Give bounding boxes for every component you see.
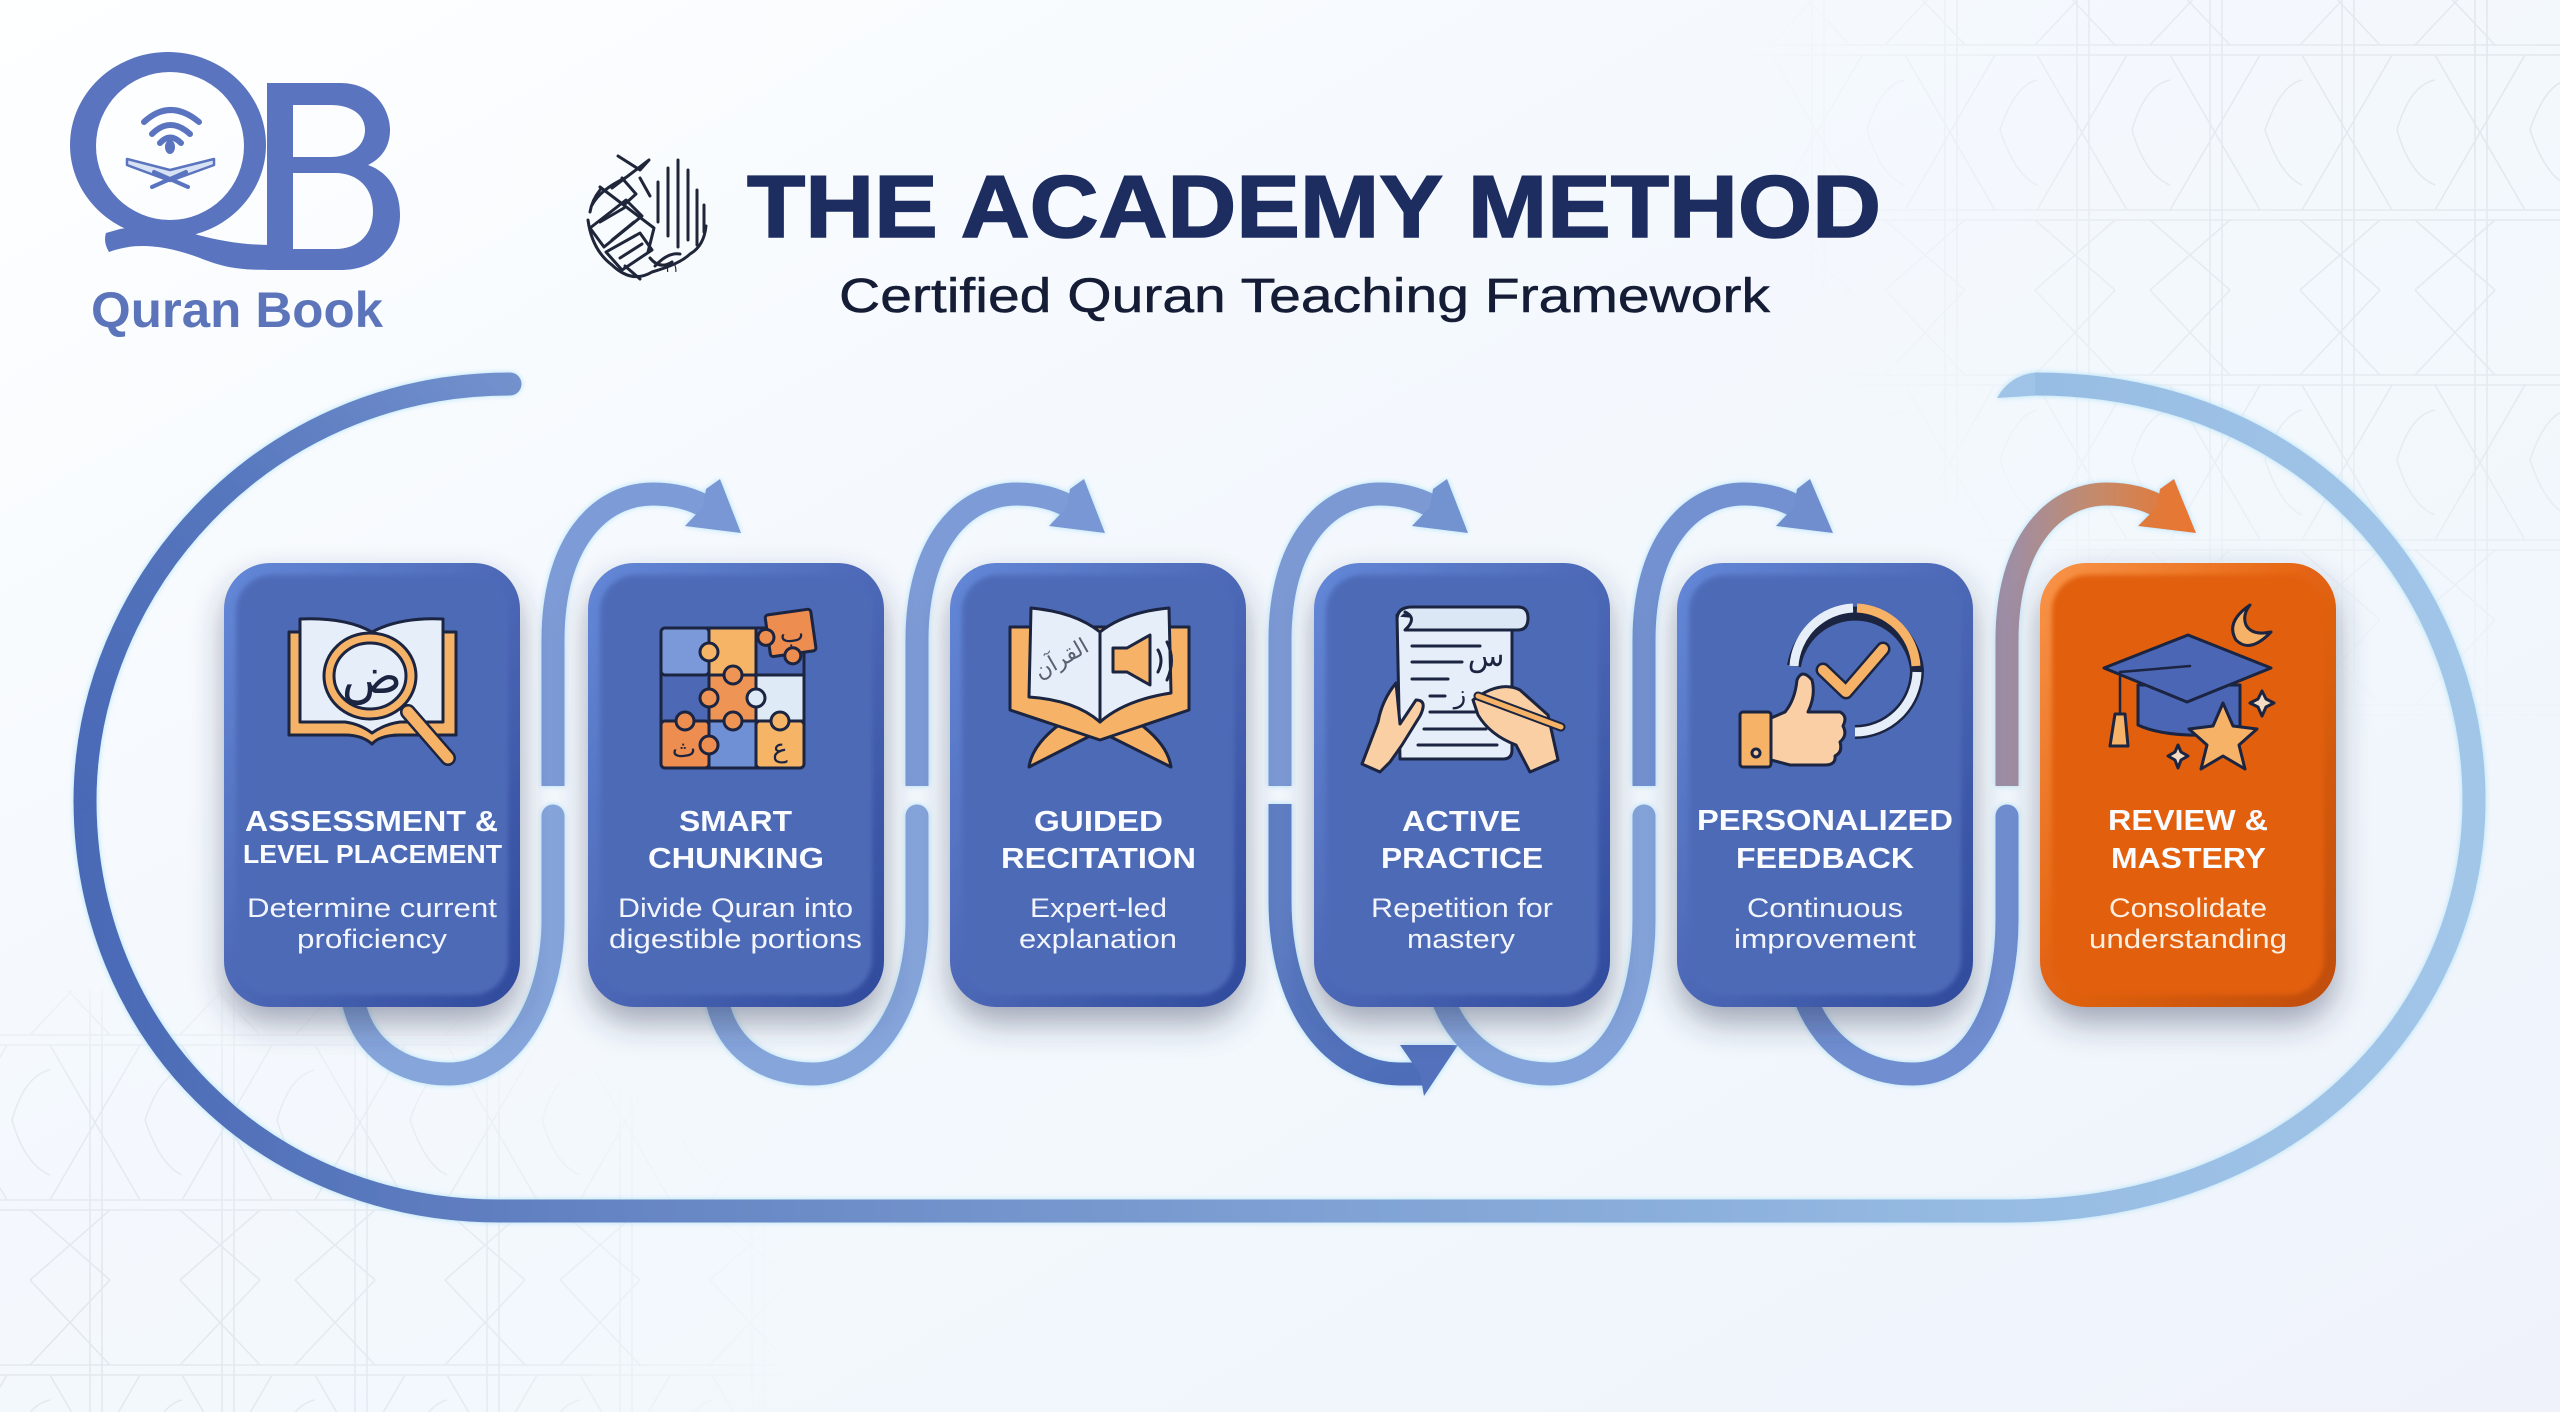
step 1 description: Determine current bbox=[247, 893, 498, 923]
step 6 title line 2: MASTERY bbox=[2111, 843, 2266, 875]
panel: step 6 review and mastery bbox=[2040, 563, 2336, 1007]
logo mark: QB letters bbox=[70, 52, 400, 270]
step 4 title line 2: PRACTICE bbox=[1381, 843, 1543, 875]
icon: scroll with writing hands bbox=[1362, 607, 1561, 772]
arrow: step 2 to step 3 connector bbox=[717, 479, 1105, 1074]
step 5 description: Continuous bbox=[1747, 893, 1903, 923]
icon: book with magnifier bbox=[289, 619, 456, 758]
step 6 description: Consolidate bbox=[2109, 893, 2267, 923]
step 4 description line 2: mastery bbox=[1407, 924, 1516, 954]
step 4 description: Repetition for bbox=[1371, 893, 1553, 923]
panel: step 5 personalized feedback bbox=[1677, 563, 1973, 1007]
arrow: step 5 to step 6 connector bbox=[1806, 479, 2196, 1074]
panel: step 1 assessment bbox=[224, 563, 520, 1007]
panel: step 2 smart chunking bbox=[588, 563, 884, 1007]
title: THE ACADEMY METHOD bbox=[747, 157, 1881, 256]
arrow: step 4 to step 5 connector bbox=[1443, 479, 1833, 1074]
arrow: step 1 to step 2 connector bbox=[353, 479, 741, 1074]
icon: open Quran on stand with speaker bbox=[1010, 608, 1189, 767]
panel: step 2 smart chunking: ع bbox=[772, 734, 788, 764]
panel: step 4 active practice: ز bbox=[1452, 680, 1466, 710]
panel: step 4 active practice bbox=[1314, 563, 1610, 1007]
step 6 description line 2: understanding bbox=[2089, 924, 2287, 954]
icon: puzzle with Arabic letters bbox=[661, 609, 818, 768]
panel: step 3 guided recitation: القرآن bbox=[1029, 632, 1093, 685]
logo: Quran Book bbox=[70, 52, 400, 338]
step 1 description line 2: proficiency bbox=[297, 924, 448, 954]
panel: step 2 smart chunking: ث bbox=[672, 734, 696, 764]
step 2 title line 2: CHUNKING bbox=[648, 843, 824, 875]
step 2 description: Divide Quran into bbox=[618, 893, 853, 923]
arrow: outer cycle loop bbox=[85, 372, 2474, 1211]
icon: graduation cap with star and moon bbox=[2104, 605, 2274, 769]
step 3 title: GUIDED bbox=[1034, 806, 1163, 838]
step 2 title: SMART bbox=[679, 806, 792, 838]
step 6 title: REVIEW & bbox=[2108, 805, 2268, 837]
step 1 title: ASSESSMENT & bbox=[245, 806, 498, 838]
step 2 description line 2: digestible portions bbox=[609, 924, 862, 954]
icon: wifi over open book bbox=[127, 110, 214, 187]
icon: thumbs up with progress ring and check bbox=[1740, 608, 1917, 767]
step 3 title line 2: RECITATION bbox=[1001, 843, 1196, 875]
arrow: step 3 to step 4 connector bbox=[1280, 479, 1468, 1096]
logo wordmark: Quran Book bbox=[91, 282, 383, 338]
step 5 title line 2: FEEDBACK bbox=[1736, 843, 1914, 875]
panel: step 1 assessment: ض bbox=[342, 647, 402, 705]
step 3 description: Expert-led bbox=[1030, 893, 1167, 923]
panel: step 2 smart chunking: ب bbox=[780, 619, 804, 649]
subtitle: Certified Quran Teaching Framework bbox=[839, 270, 1771, 323]
icon: Arabic calligraphy medallion: ٢١ bbox=[665, 261, 679, 276]
panel: step 3 guided recitation bbox=[950, 563, 1246, 1007]
step 3 description line 2: explanation bbox=[1019, 924, 1177, 954]
step 5 description line 2: improvement bbox=[1734, 924, 1917, 954]
panel: step 4 active practice: س bbox=[1468, 639, 1504, 674]
step 5 title: PERSONALIZED bbox=[1697, 805, 1953, 837]
step 4 title: ACTIVE bbox=[1402, 806, 1521, 838]
icon: Arabic calligraphy medallion bbox=[588, 156, 706, 279]
step 1 title line 2: LEVEL PLACEMENT bbox=[243, 839, 502, 869]
